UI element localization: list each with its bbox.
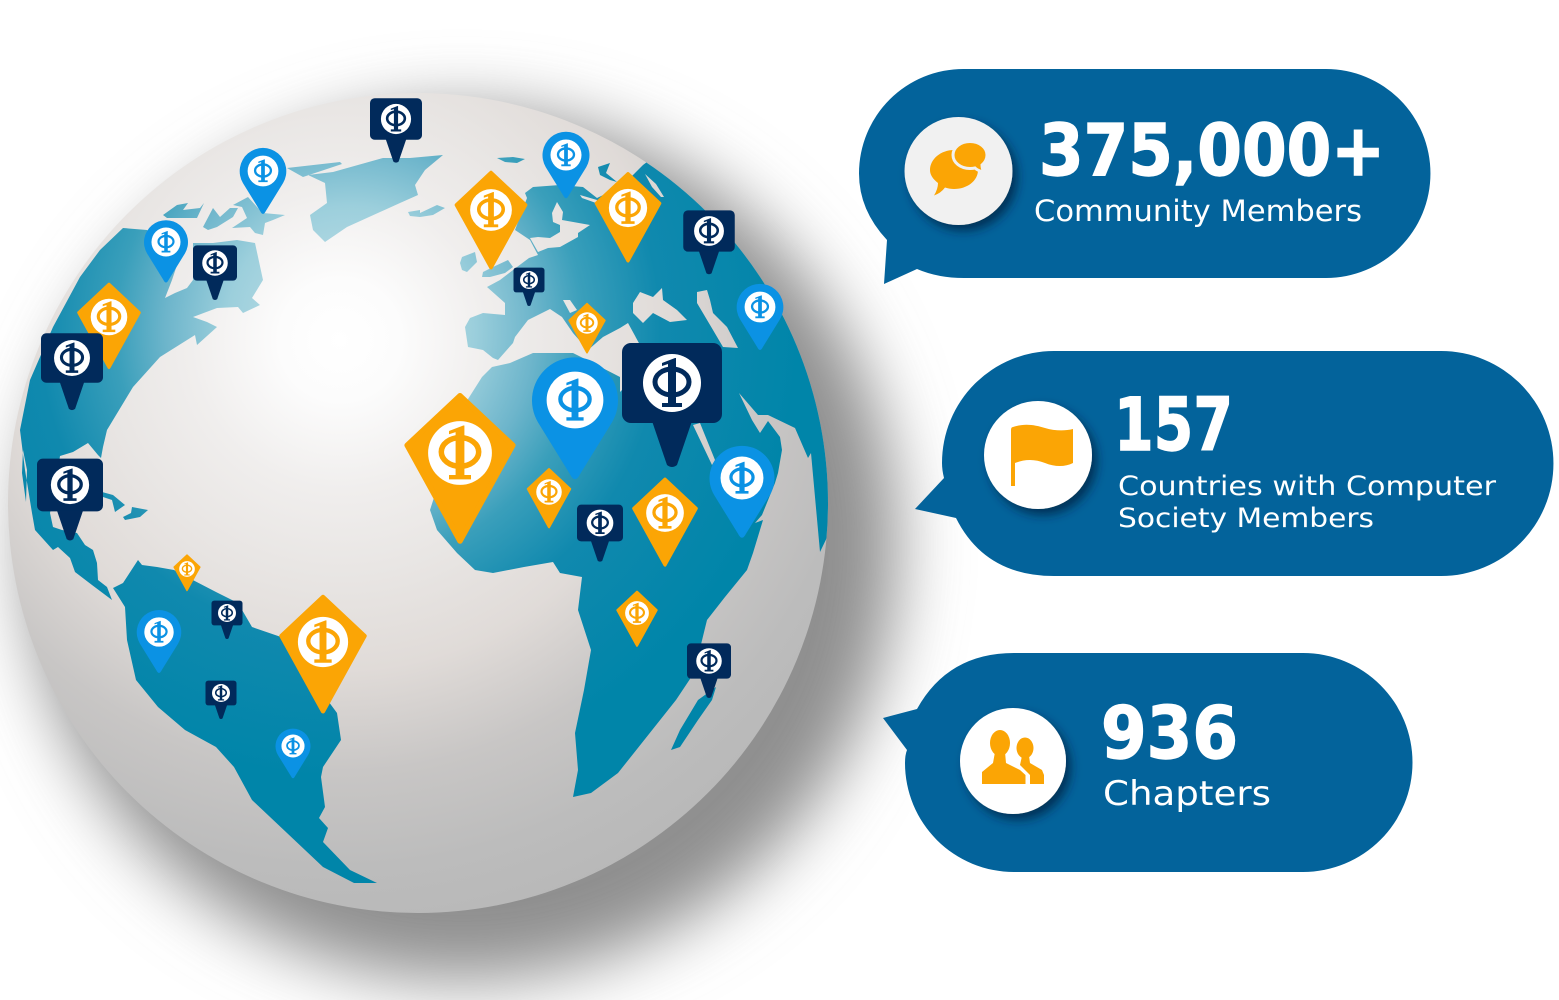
pin: blue marker, arctic canada	[240, 148, 286, 214]
icon: chat bubbles	[904, 117, 1012, 225]
callout: countries	[915, 351, 1553, 576]
pin: navy marker, north south america	[212, 601, 242, 639]
globe drop shadow	[27, 110, 897, 980]
pin: blue marker, arabia	[710, 446, 774, 538]
pin: orange marker, west africa	[407, 396, 513, 541]
pin: orange marker, sahel	[528, 469, 570, 527]
statistic: 375,000+: 375,000+	[1039, 109, 1385, 192]
eurasia and africa	[430, 150, 860, 797]
pin: blue marker, peru	[137, 610, 181, 673]
callout: community members	[859, 69, 1430, 284]
pin: navy marker, nigeria	[577, 505, 623, 562]
label: countries with computer society members: Countries with Computer	[1118, 471, 1497, 502]
pin: navy marker, southeast africa	[687, 643, 731, 698]
label: community members: Community Members	[1034, 194, 1362, 228]
pin: orange marker, italy	[569, 304, 605, 353]
pin: navy marker, russia	[683, 210, 735, 274]
pin: navy marker, middle east	[622, 343, 722, 467]
greenland	[287, 155, 443, 242]
south america	[113, 560, 377, 883]
label: chapters: Chapters	[1103, 774, 1271, 814]
world land masses	[20, 150, 860, 883]
pin: blue marker, north africa	[532, 357, 618, 479]
pin: navy marker, france	[514, 268, 544, 306]
globe sphere	[8, 93, 828, 913]
pin: navy marker, central south america	[206, 681, 236, 719]
pin: blue marker, central asia	[737, 284, 783, 350]
statistic: 936: 936	[1101, 691, 1238, 775]
pin: navy marker, top	[370, 98, 422, 163]
speech bubble	[915, 351, 1553, 576]
pin: blue marker, south brazil	[276, 729, 310, 778]
islands	[102, 157, 716, 750]
label: countries with computer society members: Society Members	[1118, 503, 1374, 534]
statistic: 157: 157	[1114, 383, 1233, 468]
globe	[8, 93, 860, 913]
pin: orange marker, west usa	[79, 284, 139, 367]
north and central america	[20, 228, 263, 600]
pin: orange marker, colombia	[174, 555, 200, 591]
pin: orange marker, russia	[596, 174, 660, 261]
pin: orange marker, uk	[456, 173, 526, 268]
callout: chapters	[883, 653, 1412, 872]
speech bubble	[859, 69, 1430, 284]
pin: orange marker, sudan	[634, 479, 696, 565]
pin: navy marker, usa	[41, 333, 103, 410]
pin: navy marker, mexico	[37, 459, 103, 540]
icon: flag	[984, 401, 1092, 509]
pin: blue marker, scandinavia	[542, 132, 590, 198]
pin: blue marker, west canada	[144, 220, 188, 282]
pin: orange marker, central africa	[617, 592, 657, 646]
pin: navy marker, canada	[193, 245, 237, 300]
location pins	[37, 98, 783, 778]
speech bubble	[883, 653, 1412, 872]
icon: people	[960, 708, 1066, 814]
pin: orange marker, brazil	[281, 597, 365, 711]
